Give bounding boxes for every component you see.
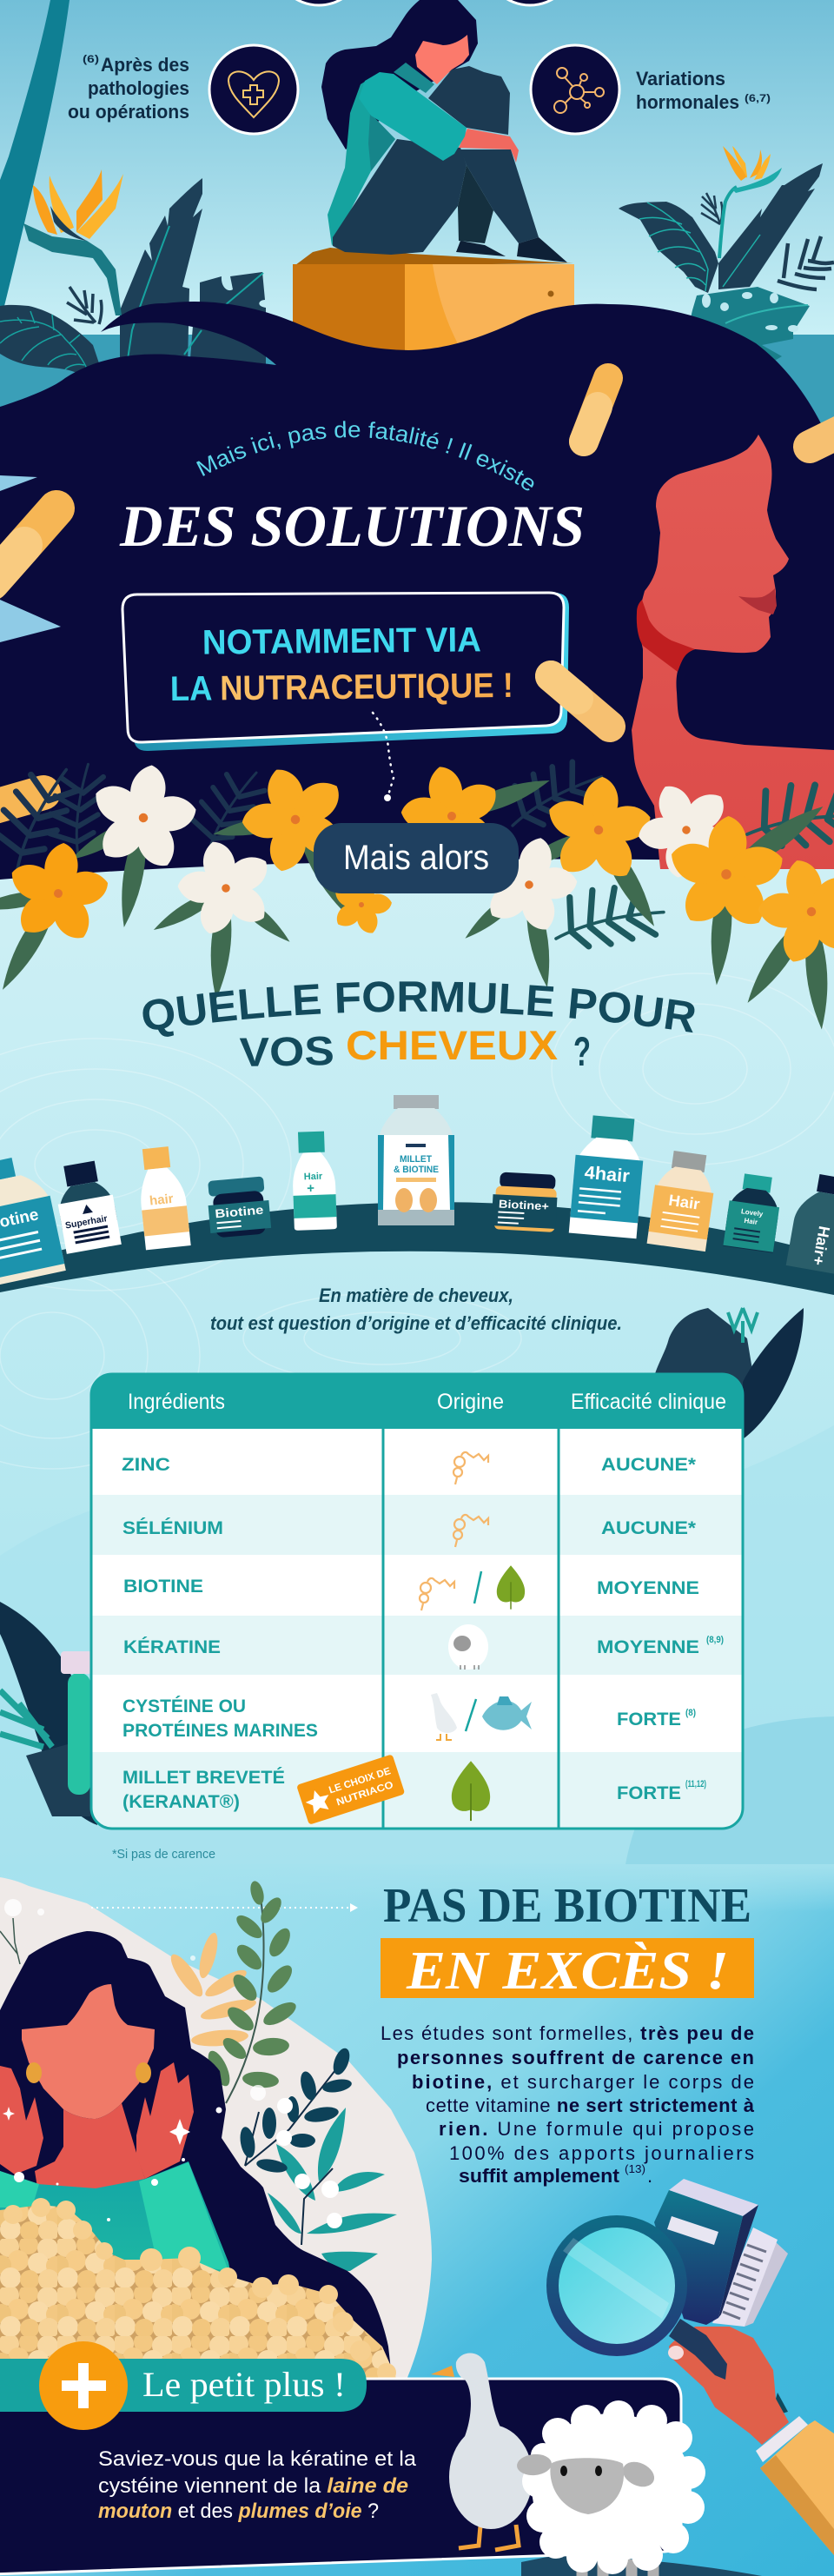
bottle: biotine left [0,1152,66,1289]
bottle: hair plus [291,1131,337,1231]
efficacy values: (8) [685,1708,696,1718]
left caption: pathologies: (6) [83,53,99,65]
panel text: cystéine viennent de la laine de [98,2474,408,2498]
paragraph: Les études sont formelles, très peu de [381,2022,754,2044]
palm fronds [0,747,608,873]
bottle: hair plus right: Hair+ [809,1225,833,1266]
bottle: superhair [51,1159,122,1254]
flowers: hibiscus garland [0,752,834,975]
intro sentence: tout est question d’origine et d’efficacité clinique. [210,1312,622,1334]
ingredient names: SÉLÉNIUM [122,1518,223,1538]
small fern [701,193,722,224]
heading: vos cheveux: ? [573,1028,591,1074]
left caption: pathologies [68,53,189,123]
paragraph: biotine, et surcharger le corps de [412,2071,754,2093]
pill: mais alors: Mais alors [343,839,489,877]
big veined leaf [619,202,718,293]
ingredient names: (KERANAT®) [122,1792,240,1812]
pill: mais alors [314,823,519,893]
feather vein [723,235,760,287]
efficacy values: FORTE [617,1783,681,1803]
bottle: hair plus right [786,1172,834,1277]
front shin [460,149,539,243]
stem [719,187,737,258]
icon: molecule biotine [420,1578,454,1610]
ingredient names: ZINC [122,1455,170,1475]
goose body [449,2425,533,2529]
face [550,2458,624,2514]
arm [359,72,467,161]
test tube [61,1651,92,1795]
right hand [136,2062,194,2179]
panel text [98,2447,417,2523]
back hair [321,0,478,149]
bottle: millet et biotine: & BIOTINE [394,1165,439,1175]
feather leaf [120,178,202,365]
efficacy values [597,1455,724,1803]
left hand [0,2066,43,2174]
left earring [26,2062,42,2083]
bottle: hair plus: + [307,1181,315,1196]
sleeve shade [760,2455,834,2555]
bottle: hair cream [136,1145,191,1250]
legs [582,2559,653,2576]
header labels: Origine [437,1390,504,1414]
fern [67,287,102,324]
seated woman [321,0,567,262]
table body [91,1374,743,1829]
band: le petit plus [0,2341,367,2430]
header labels [128,1390,726,1414]
back page [745,2242,788,2327]
paragraph: personnes souffrent de carence en [397,2047,754,2068]
lens reflection [563,2238,669,2319]
ingredient names: BIOTINE [123,1577,203,1597]
icon: molecule selenium [453,1515,488,1547]
shoes [456,237,567,262]
panel text: mouton et des plumes d’oie ? [98,2500,379,2523]
sleeve panels [0,2162,228,2271]
header labels: Ingrédients [128,1390,225,1414]
icon: molecule zinc [453,1452,488,1484]
efficacy values: FORTE [617,1710,681,1730]
ingredient names: KÉRATINE [123,1637,221,1657]
face [415,35,469,84]
ingredient names: PROTÉINES MARINES [122,1721,318,1741]
magnifier handle [669,2319,727,2380]
paragraph: rien. Une formule qui propose [439,2118,754,2140]
teal palm fronds [546,753,834,984]
feather leaf [718,163,823,289]
heading: vos cheveux [239,1022,591,1075]
dotted connector [373,713,394,801]
seat and thigh [333,139,467,255]
icon: fish [482,1696,532,1730]
left plant group [0,169,266,380]
bottle: superhair: Superhair [64,1213,109,1232]
round leaf veins [0,311,90,378]
callout box: nutraceutique [122,593,569,751]
dotted arrow [91,1903,358,1912]
light blue spikes [0,475,61,642]
goose legs [459,2516,519,2550]
bottle: hair orange: Hair [667,1192,701,1213]
paragraph: cette vitamine ne sert strictement à [426,2095,755,2116]
bottle: lovely hair: Hair [744,1217,758,1226]
green branch stem [226,1886,264,2103]
cream blob [0,1877,432,2386]
millet top grains [3,2198,396,2382]
magnifying glass [553,2221,681,2350]
badge text: LE CHOIX DE [328,1766,393,1796]
wooden box [293,248,574,360]
bottle: biotine plus jar [491,1172,559,1232]
bottle: hair orange [647,1149,718,1251]
woman with long hair [0,1899,393,2386]
ears [516,2453,659,2492]
shelf arc [0,1202,834,1295]
right caption: hormones: hormonales [636,91,739,113]
red woman profile [632,435,834,869]
bottle: biotine plus jar: Biotine+ [499,1197,550,1213]
leaf veins [639,202,708,291]
bottle: millet et biotine: MILLET [400,1154,432,1165]
lips [738,588,777,614]
capsules [0,378,834,810]
banner: en excès: EN EXCÈS ! [406,1942,729,2001]
wool [522,2400,705,2574]
efficacy values: AUCUNE* [601,1518,697,1538]
goose neck and head [456,2353,504,2447]
heading: vos cheveux: VOS [239,1027,334,1075]
intro sentence: En matière de cheveux, [319,1285,513,1306]
efficacy values: (8,9) [706,1635,724,1645]
header labels: Efficacité clinique [571,1390,726,1414]
efficacy values: MOYENNE [597,1637,699,1657]
tinted rows [92,1495,742,1828]
palm trunk [0,0,70,306]
flower leaves [0,772,832,1031]
footnote: *Si pas de carence [112,1847,215,1862]
collar [394,63,434,93]
bottle: hair plus: Hair [304,1172,323,1182]
paragraph [381,2022,755,2187]
efficacy values: AUCUNE* [601,1455,697,1475]
background pattern: contour lines [0,973,834,1469]
table header [91,1374,743,1429]
icon: molecule [531,45,619,134]
lens [553,2221,681,2350]
panel text: Saviez-vous que la kératine et la [98,2447,417,2471]
sparkles [3,1899,342,2228]
left caption: pathologies: Après des [101,54,189,76]
sheep [516,2400,705,2576]
heading: vos cheveux: CHEVEUX [346,1022,558,1068]
hair [0,1931,393,2386]
book [654,2179,788,2327]
intro sentence [210,1285,622,1334]
ingredient names: CYSTÉINE OU [122,1696,246,1716]
paragraph: suffit amplement [459,2165,620,2187]
sweater back [328,72,395,246]
bottle: hair cream: hair [149,1192,175,1209]
icon: leaf biotine [497,1565,525,1610]
book side [718,2205,758,2318]
icon: heart with cross [209,45,298,134]
feather vein [127,226,169,365]
right caption: hormones [636,68,771,113]
bottle: lovely hair: Lovely [740,1207,764,1218]
eyes [560,2466,602,2476]
bottle: lovely hair [723,1172,784,1253]
face [22,1984,155,2119]
arc intro text: Mais ici, pas de fatalité ! Il existe [196,421,533,490]
leaves behind table left [0,1602,97,1825]
slash [474,1571,481,1603]
knee [428,66,510,135]
efficacy values: MOYENNE [597,1578,699,1598]
paragraph: . [647,2165,652,2187]
monstera vein [725,305,808,323]
monstera holes [702,292,798,332]
icon: plus [39,2341,128,2430]
top cut icon circles [274,0,575,5]
slash [466,1699,476,1731]
capsule over box [551,676,610,727]
page lines [723,2245,766,2319]
navy panel [0,2379,681,2574]
icon: sheep small [448,1624,488,1670]
orange leaves [166,1931,258,2048]
ingredient names [122,1455,318,1812]
bottle: millet et biotine [378,1095,454,1225]
sweater shade [368,113,395,171]
table [91,1374,743,1829]
bottle: biotine jar [206,1176,272,1238]
plants behind woman [0,1880,397,2271]
left caption: pathologies: pathologies [88,77,189,99]
callout text line 1: NOTAMMENT VIA [202,621,481,662]
bottle: 4hair: 4hair [584,1163,631,1186]
neck and chest [35,2103,145,2192]
heading: des solutions: DES SOLUTIONS [119,493,585,559]
front page [712,2227,778,2327]
sleeve [760,2420,834,2555]
bird of paradise bract [23,223,122,315]
icon: leaf millet [452,1761,490,1821]
bract [731,168,782,193]
badge: le choix de nutriaco [296,1754,405,1825]
ingredient names: MILLET BREVETÉ [122,1768,285,1788]
bottom strip [521,2555,762,2576]
book label [667,2216,718,2245]
right earring [136,2062,151,2083]
right caption: hormones: Variations [636,68,725,90]
callout text line 2: LA NUTRACEUTIQUE ! [170,667,513,708]
icon: star [303,1787,333,1816]
monstera vein [184,273,263,355]
navy hair wave panel [0,302,834,880]
back shin [458,165,493,243]
badge text: NUTRIACO [335,1780,394,1808]
band title: Le petit plus ! [142,2365,346,2404]
right fern [778,236,834,289]
book cover [654,2190,743,2325]
twig top left [0,1918,20,1964]
right caption: hormones: (6,7) [745,92,771,104]
bird of paradise petals [33,169,123,241]
hand with cuff and sleeve [668,2319,834,2555]
heading: quelle formule pour: QUELLE FORMULE POUR [142,981,695,1037]
cuff [756,2416,808,2462]
teal sweater [0,2161,235,2294]
navy branch [238,2046,353,2245]
teal leaves [268,2108,397,2271]
goose [431,2353,533,2550]
table frame [91,1374,743,1829]
hand [669,2327,789,2445]
monstera leaf [678,287,810,374]
round veined leaf [0,305,102,380]
leaves behind table right [652,1308,804,1439]
bird of paradise petals [723,146,771,181]
bottle: biotine jar: Biotine [215,1203,264,1220]
handle end [776,2393,788,2413]
nail [668,2346,684,2360]
bottle row [0,1095,834,1289]
efficacy values: (11,12) [685,1779,706,1789]
background blobs behind table [0,1425,834,1864]
paragraph: 100% des apports journaliers [449,2142,754,2164]
monstera leaf [189,272,266,369]
left caption: pathologies: ou opérations [68,101,189,123]
heading: pas de biotine: PAS DE BIOTINE [383,1879,751,1933]
book top [669,2179,758,2216]
goose beak [431,2366,454,2377]
neck shadow [637,600,695,672]
right plant group [619,146,834,374]
green leaves [204,1880,300,2089]
paragraph: (13) [625,2162,645,2175]
millet heap [0,2198,400,2386]
icon: goose small [431,1693,457,1740]
hand [459,129,519,163]
bottle: 4hair [569,1114,646,1238]
